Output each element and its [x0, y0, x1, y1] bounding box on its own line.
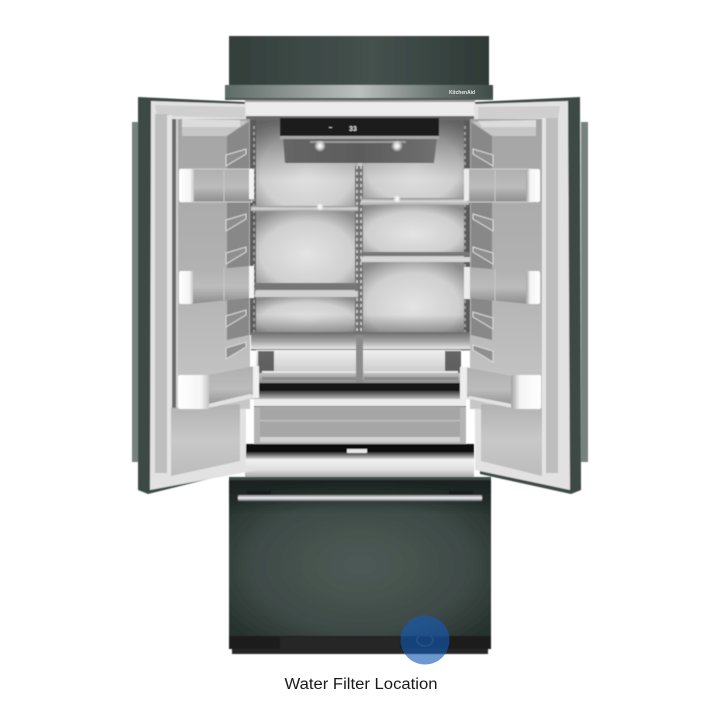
- control panel and light hood: [280, 118, 439, 163]
- control panel and light hood: 33: [349, 126, 357, 133]
- left door bin top: [179, 169, 254, 202]
- top grille panel: [229, 36, 489, 86]
- right door shelf rails: [473, 149, 493, 362]
- left door bin bottom: [178, 366, 259, 409]
- left door bottom panel: [171, 404, 240, 476]
- right door: [460, 97, 588, 494]
- shelf rails: [250, 120, 471, 336]
- right door frame: [474, 101, 570, 490]
- crisper drawers: [250, 332, 472, 391]
- right door outer panel: [475, 97, 581, 494]
- shelves: [251, 195, 470, 297]
- refrigerator illustration: [132, 36, 588, 654]
- right door bottom panel: [481, 404, 542, 476]
- right door bin top: [464, 169, 540, 202]
- right door bin bottom: [460, 367, 541, 409]
- left door bin middle: [179, 266, 254, 304]
- left door back trim: [132, 122, 138, 462]
- logo on trim band: KitchenAid: [449, 90, 475, 96]
- right door back trim: [581, 122, 588, 462]
- left door liner: [172, 119, 250, 409]
- left door: [132, 97, 259, 494]
- left door outer panel: [138, 97, 245, 494]
- interior cavity: [245, 100, 475, 336]
- right door liner: [470, 119, 542, 409]
- bottom freezer drawer: [229, 477, 491, 637]
- caption: Water Filter Location: [284, 676, 438, 693]
- water filter icon: [417, 634, 433, 646]
- highlight circle: water filter location: [400, 616, 450, 664]
- lower pantry drawer: [245, 391, 474, 477]
- cavity back wall sections: [256, 120, 464, 335]
- drawer handle: [238, 491, 482, 501]
- left door frame: [150, 101, 258, 490]
- left door shelf rails: [226, 149, 246, 359]
- bottom kick plate grille: [229, 636, 491, 654]
- top trim band: [225, 85, 493, 100]
- right door bin middle: [464, 267, 540, 304]
